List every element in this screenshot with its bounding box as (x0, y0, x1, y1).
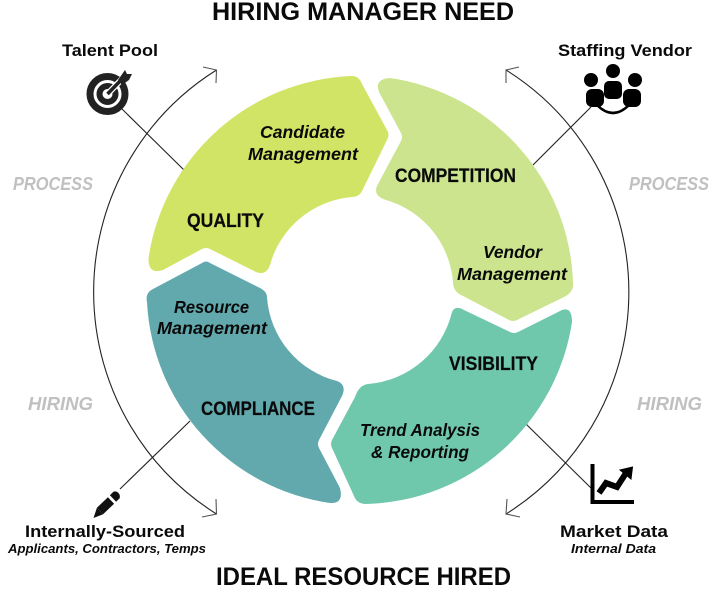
panel: visibility: VISIBILITY (449, 354, 538, 375)
panel: competition: COMPETITION (395, 166, 516, 187)
label: hiring right: HIRING (637, 394, 702, 414)
panel: competition: Management (457, 264, 568, 284)
label: market data: Market Data (560, 522, 669, 541)
panel: visibility: & Reporting (371, 442, 469, 462)
label: hiring left: HIRING (28, 394, 93, 414)
connector: talent pool (122, 109, 184, 170)
panel: compliance (147, 262, 344, 503)
panel: quality: Management (248, 144, 359, 164)
panel: quality: Candidate (260, 122, 345, 142)
left curved arrow: process to hiring (94, 67, 216, 517)
label: internally-sourced: Internally-Sourced (25, 522, 185, 541)
right curved arrow: process to hiring (506, 67, 629, 517)
panel: visibility (331, 308, 572, 504)
sublabel: applicants, contractors, temps: Applicants, Contractors, Temps (7, 542, 206, 556)
connector: internally-sourced (120, 421, 190, 489)
label: talent pool: Talent Pool (62, 41, 158, 60)
icon: line chart (592, 464, 634, 502)
connector: staffing vendor (533, 107, 591, 165)
icon: pencil (94, 491, 120, 518)
panel: compliance: COMPLIANCE (201, 399, 315, 420)
panel: competition: Vendor (483, 242, 543, 262)
panel: quality: QUALITY (187, 211, 264, 232)
panel: compliance: Management (157, 318, 268, 338)
connector: market data (526, 424, 592, 489)
panel: competition (376, 78, 573, 321)
sublabel: internal data: Internal Data (571, 542, 656, 556)
panel: quality (148, 76, 388, 273)
label: staffing vendor: Staffing Vendor (558, 41, 692, 60)
panel: compliance: Resource (174, 297, 249, 317)
label: process left: PROCESS (13, 174, 93, 194)
icon: target with dart (90, 70, 132, 112)
panel: visibility: Trend Analysis (360, 420, 480, 440)
title: ideal resource hired: IDEAL RESOURCE HIRED (216, 563, 511, 591)
icon: team of people (584, 64, 642, 113)
